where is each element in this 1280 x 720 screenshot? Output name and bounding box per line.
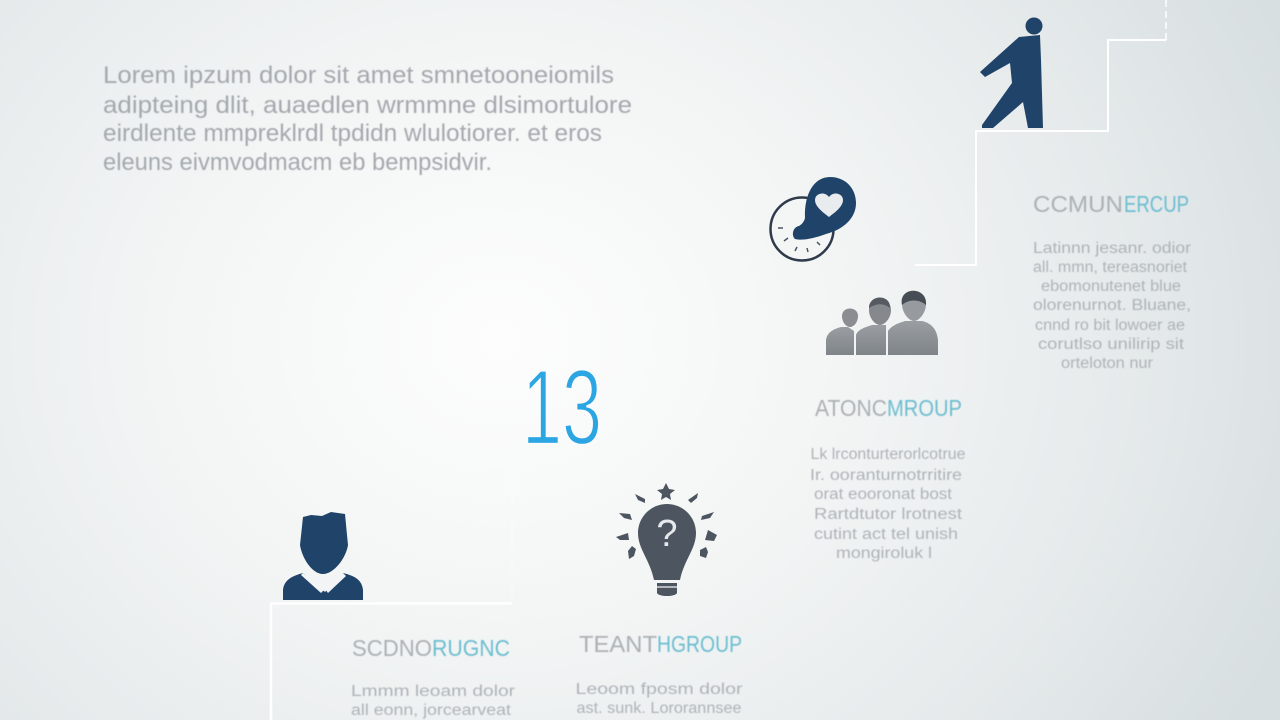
text block: student group: Lmmm leoam dolor	[351, 683, 515, 700]
heading: student group: SCDNO	[352, 635, 432, 661]
text block: community group: olorenurnot. Bluane,	[1033, 297, 1191, 314]
heading: team group: TEANT	[579, 631, 657, 657]
heading: action group: MROUP	[887, 395, 962, 421]
intro paragraph: Lorem ipzum dolor sit amet smnetooneiomils	[103, 62, 614, 89]
text block: community group: corutlso unilirip sit	[1038, 336, 1185, 353]
text block: team group: Leoom fposm dolor	[576, 681, 742, 698]
intro paragraph: eleuns eivmvodmacm eb bempsidvir.	[103, 149, 492, 176]
intro paragraph	[103, 62, 632, 176]
icon: clock with heart pin	[770, 177, 856, 260]
text block: action group: orat eooronat bost	[814, 486, 953, 503]
text block: action group	[810, 446, 966, 562]
icon: walking figure	[980, 18, 1043, 128]
text block: team group	[576, 681, 742, 717]
intro paragraph: eirdlente mmpreklrdl tpdidn wlulotiorer. et eros	[103, 120, 602, 147]
icon: student bust	[283, 512, 363, 600]
heading: community group: ERCUP	[1124, 191, 1189, 217]
text block: action group: Lk lrconturterorlcotrue	[810, 446, 966, 463]
heading: community group	[1033, 191, 1189, 217]
text block: action group: Rartdtutor lrotnest	[814, 506, 963, 523]
heading: action group	[815, 395, 962, 421]
heading: action group: ATONC	[815, 395, 887, 421]
heading: student group	[352, 635, 510, 661]
intro paragraph: adipteing dlit, auaedlen wrmmne dlsimortulore	[103, 92, 632, 119]
icon: idea light bulb: ?	[656, 513, 678, 555]
heading: student group: RUGNC	[432, 635, 510, 661]
text block: action group: mongiroluk l	[836, 545, 932, 562]
text block: student group: all eonn, jorcearveat	[351, 702, 512, 719]
text block: community group: cnnd ro bit lowoer ae	[1035, 317, 1185, 334]
text block: community group: Latinnn jesanr. odior	[1033, 240, 1191, 257]
text block: community group: all. mmn, tereasnoriet	[1033, 259, 1188, 276]
heading: team group: HGROUP	[657, 631, 742, 657]
text block: community group	[1033, 240, 1191, 372]
text block: student group	[351, 683, 515, 719]
text block: community group: orteloton nur	[1061, 355, 1153, 372]
icon: idea light bulb	[616, 483, 717, 596]
big number 13: 13	[522, 347, 602, 467]
text block: community group: ebomonutenet blue	[1041, 278, 1181, 295]
heading: team group	[579, 631, 742, 657]
text block: action group: Ir. ooranturnotrritire	[810, 467, 962, 484]
heading: community group: CCMUN	[1033, 191, 1123, 217]
staircase outline	[271, 0, 1166, 720]
text block: action group: cutint act tel unish	[814, 526, 958, 543]
icon: team of three	[826, 291, 938, 355]
text block: team group: ast. sunk. Lororannsee	[576, 700, 742, 717]
